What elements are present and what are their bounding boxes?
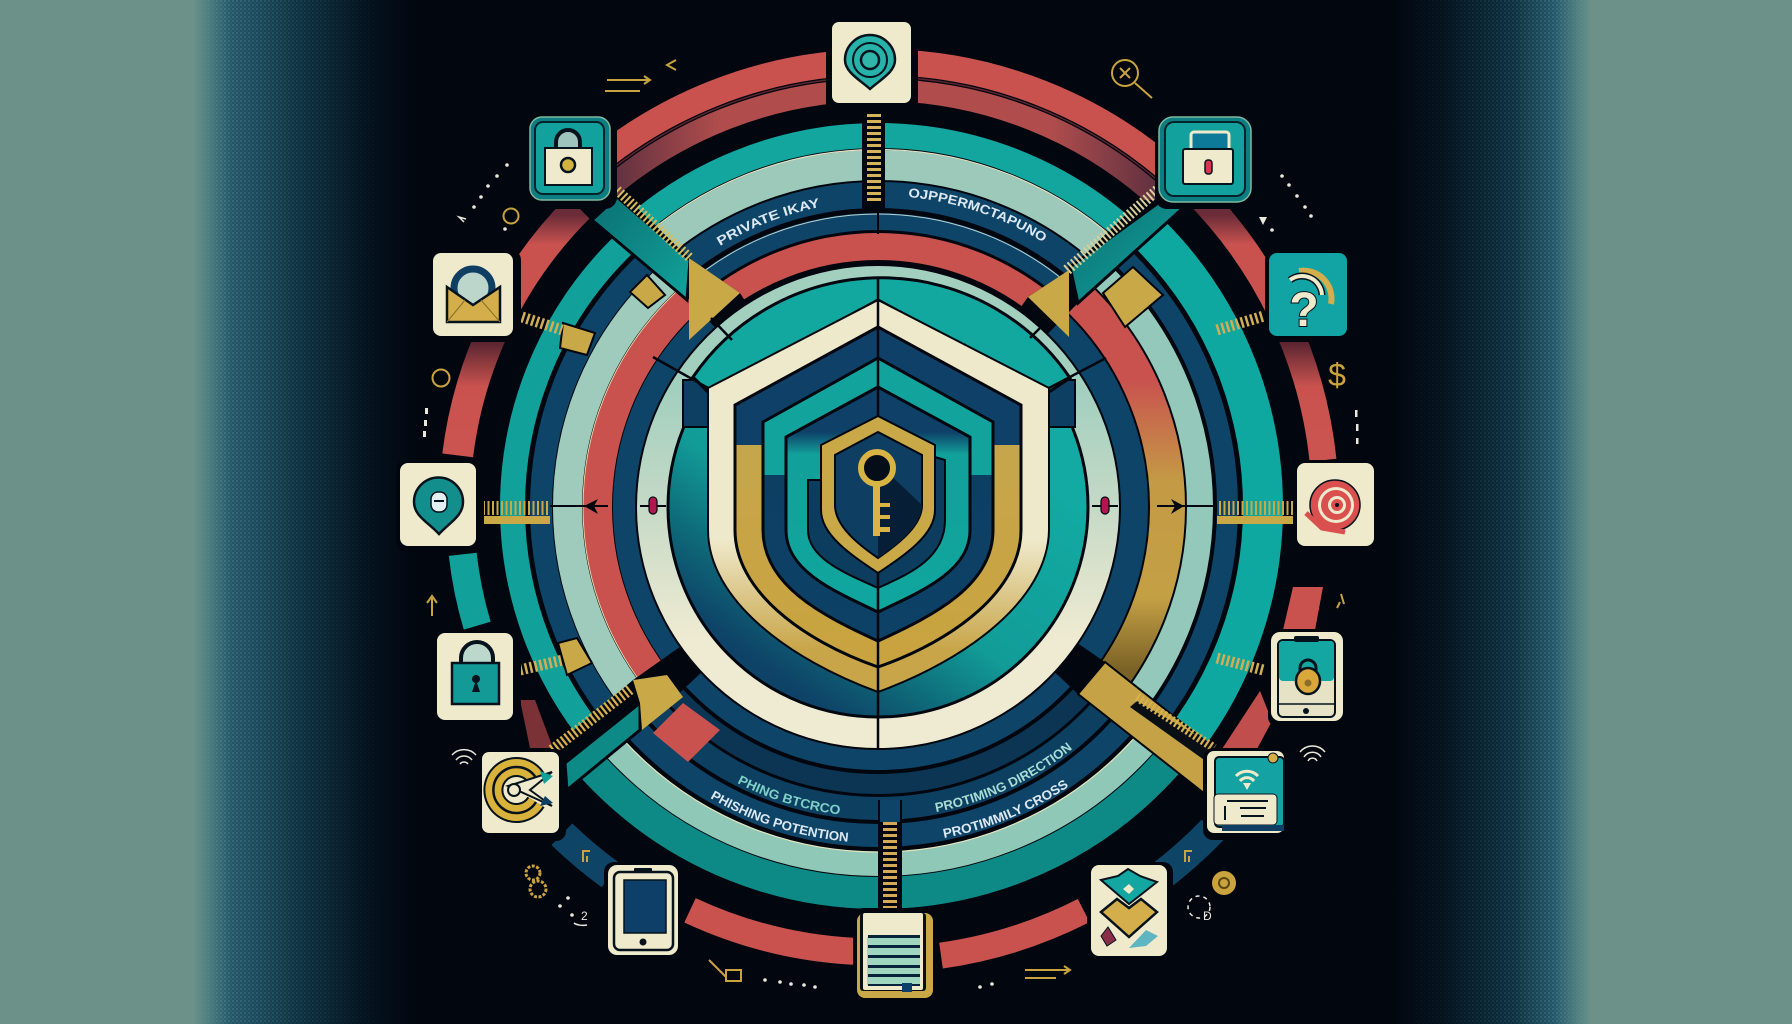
curved ring labels: PROTIMING DIRECTION xyxy=(935,742,1072,812)
upper-right teal wedge connector xyxy=(1067,185,1183,303)
top ladder connector xyxy=(862,106,885,234)
curved ring labels: PROTIMMILY CROSS xyxy=(943,780,1068,838)
gold key shield xyxy=(821,416,935,573)
icon: envelope lock xyxy=(429,250,521,342)
curved ring labels: PHING BTCRCO xyxy=(738,775,840,814)
gold arrow triangles xyxy=(689,258,1069,340)
gold ring blocks xyxy=(558,267,1163,675)
key shield inner panel xyxy=(835,432,922,558)
upper-left teal wedge connector xyxy=(592,190,690,300)
lower-left gold and teal wedge connector xyxy=(552,675,720,790)
icon: chevrons lower right xyxy=(1087,862,1173,962)
horizontal right connector with arrow and marker xyxy=(1157,499,1297,524)
teal and navy shield xyxy=(763,358,993,641)
icon: right spiral xyxy=(1293,460,1381,552)
left sector rings xyxy=(500,238,714,730)
magenta ring markers xyxy=(640,497,1118,514)
curved ring labels: PHISHING POTENTION xyxy=(710,790,848,842)
icon: left location pin xyxy=(396,460,484,552)
icon: tablet lower left xyxy=(604,862,684,961)
side ladder connectors xyxy=(520,316,1264,670)
cream outer shield xyxy=(708,300,1049,692)
lower-right gold band connector xyxy=(1078,662,1217,794)
icon: phone with lock lower right xyxy=(1268,629,1348,727)
icon: teal lock upper left xyxy=(525,113,617,209)
icon: document bottom xyxy=(853,908,939,1003)
dark inner shield xyxy=(808,440,945,588)
icon: question mark: ? xyxy=(1289,284,1319,337)
curved ring labels xyxy=(710,188,1072,842)
right sector rings xyxy=(1048,224,1283,741)
dollar sign and gold coin xyxy=(1212,357,1346,895)
icon: teal lock upper right xyxy=(1155,113,1257,209)
dollar sign and gold coin: $ xyxy=(1328,357,1346,393)
horizontal left connector with arrow and marker xyxy=(480,499,608,524)
center line xyxy=(877,278,879,749)
icon: padlock lower left xyxy=(433,630,521,727)
icon: target pin top xyxy=(826,20,918,112)
bottom sector rings xyxy=(582,673,1178,908)
navy shoulder blocks xyxy=(683,380,1075,427)
navy and gold shield xyxy=(735,327,1021,667)
icon: wifi card xyxy=(1203,748,1291,840)
icon: gold key xyxy=(861,452,893,536)
inner navy and teal shield xyxy=(786,387,970,612)
white decorative dots and wifi marks xyxy=(423,163,1358,989)
key shield shadow xyxy=(878,470,922,558)
outer red and teal arc segments xyxy=(433,62,1323,956)
icon: gold C emblem xyxy=(478,749,566,841)
curved ring labels: PRIVATE IKAY xyxy=(716,198,818,246)
curved ring labels: OJPPERMCTAPUNO xyxy=(909,188,1046,240)
teal house band xyxy=(693,278,1070,392)
icon: question mark xyxy=(1265,250,1355,342)
bottom ladder connector xyxy=(878,800,902,914)
top sector rings xyxy=(638,123,1126,306)
gold decorative marks xyxy=(427,60,1344,981)
white decorative dots and wifi marks: 2 xyxy=(581,909,588,923)
central layered shield xyxy=(635,264,1121,750)
white decorative dots and wifi marks: D xyxy=(1203,909,1212,923)
ring dividers xyxy=(653,318,1106,388)
